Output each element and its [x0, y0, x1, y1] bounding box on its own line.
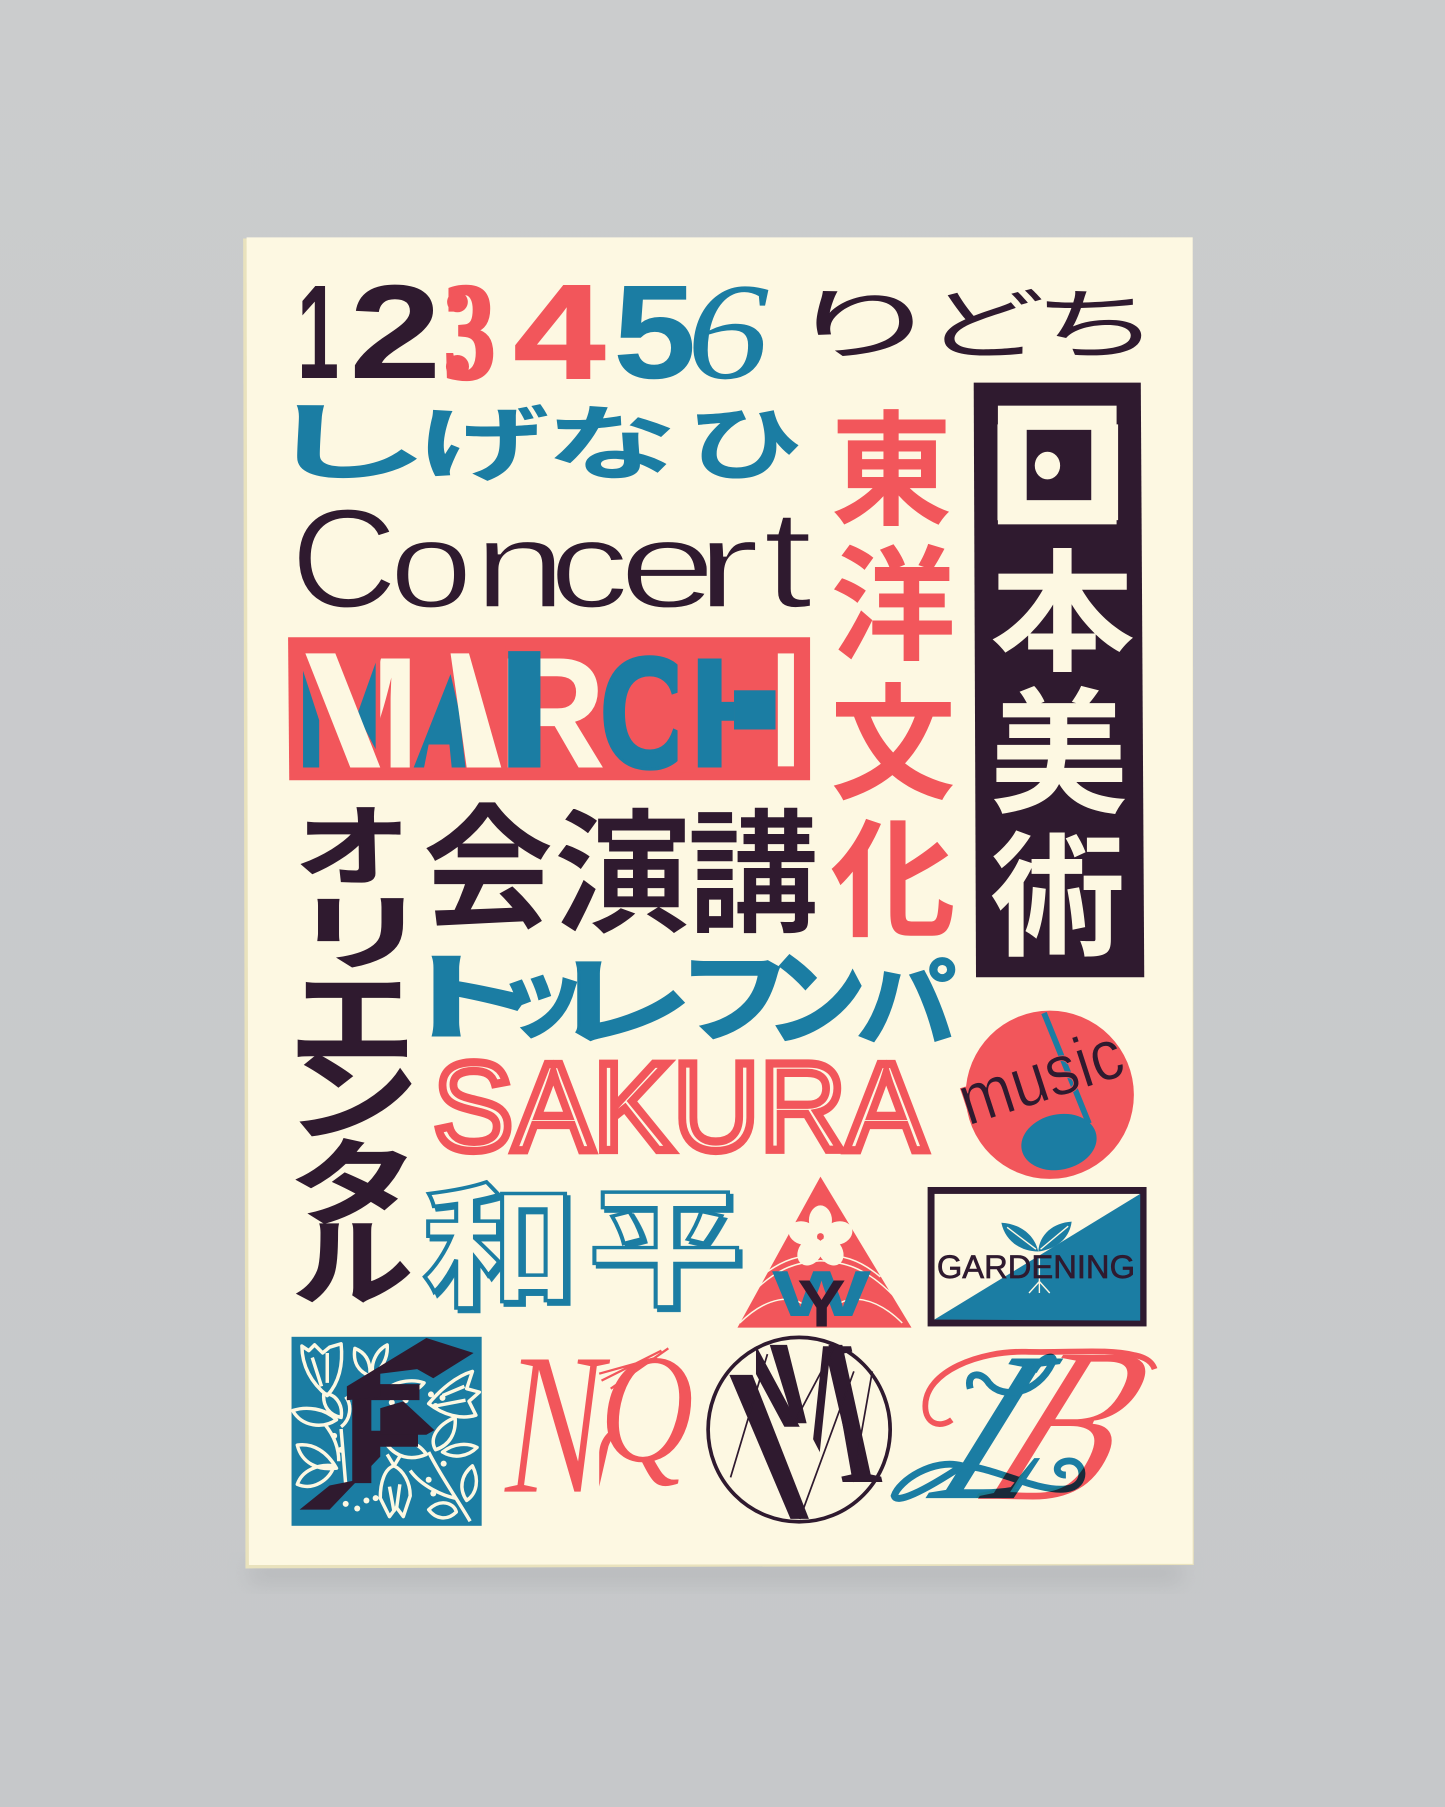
kanji: 和平 outlined: 平	[587, 1144, 744, 1333]
badge: triangle emblem with flower: W	[772, 1258, 872, 1330]
word: SAKURA: SAKURA	[433, 1038, 926, 1178]
kanji: 講演会 reading right to left	[422, 759, 819, 961]
panel: cream card	[243, 237, 1194, 1568]
katakana: パンフレット reading right to left: ン	[765, 913, 867, 1067]
badge: GARDENING box	[931, 1190, 1143, 1323]
numerals 123456	[297, 254, 769, 409]
numerals 123456: 5	[613, 257, 696, 407]
badge: GARDENING box: GARDENING	[937, 1249, 1135, 1285]
vertical kanji: 東洋文化: 東	[831, 372, 952, 551]
word: Concert: t	[763, 481, 813, 638]
monogram: N Q in red	[503, 1311, 694, 1537]
panel: MARCH red banner: C	[599, 624, 694, 801]
word: Concert: r	[695, 496, 760, 634]
panel: 日本美術 dark column: 日	[971, 384, 1144, 544]
word: Concert: c	[549, 497, 629, 634]
kana: ひなげし in blue: し	[261, 374, 431, 497]
vertical kanji: 東洋文化: 文	[830, 645, 956, 826]
badge: triangle emblem with flower: Y	[797, 1266, 846, 1341]
kana: ひなげし in blue: ひ	[687, 378, 803, 497]
panel: MARCH red banner: H	[687, 625, 806, 802]
katakana: パンフレット reading right to left	[384, 913, 956, 1067]
kanji: 講演会 reading right to left: 演	[553, 767, 691, 961]
badge: triangle emblem with flower	[737, 1177, 911, 1341]
kanji: 講演会 reading right to left: 会	[422, 759, 554, 958]
kanji: 和平 outlined	[421, 1140, 744, 1336]
vertical katakana: オリエンタル: タ	[289, 1109, 419, 1244]
badge: music note circle: music	[948, 1013, 1133, 1141]
vertical kanji: 東洋文化: 化	[830, 779, 956, 963]
numerals 123456: 4	[514, 257, 605, 407]
monogram: L B overlapped: B	[951, 1301, 1186, 1550]
monogram: L B overlapped: L	[903, 1308, 1119, 1545]
letter F	[300, 1338, 474, 1514]
numerals 123456: 6	[687, 254, 769, 408]
floral pattern	[293, 1344, 479, 1521]
vertical katakana: オリエンタル: ン	[286, 1014, 418, 1161]
kana: ちどり reading right to left: り	[781, 263, 947, 375]
kana: ひなげし in blue: げ	[418, 378, 549, 497]
kana: ちどり reading right to left: ち	[1032, 263, 1160, 375]
word: Concert: e	[619, 496, 717, 634]
kana: ひなげし in blue	[261, 374, 803, 497]
kana: ちどり reading right to left: ど	[923, 263, 1045, 375]
monogram: circle M: M	[711, 1297, 897, 1527]
panel: 日本美術 dark column: 美	[990, 645, 1128, 841]
katakana: パンフレット reading right to left: ッ	[497, 926, 588, 1056]
kana: ひなげし in blue: な	[546, 378, 677, 497]
numerals 123456: 2	[349, 257, 441, 406]
katakana: パンフレット reading right to left: パ	[856, 928, 956, 1067]
numerals 123456: 3	[444, 256, 495, 409]
vertical katakana: オリエンタル: ル	[293, 1187, 413, 1325]
katakana: パンフレット reading right to left: フ	[678, 919, 792, 1062]
vertical katakana: オリエンタル: オ	[295, 777, 410, 904]
letter F: F	[343, 1354, 424, 1514]
numerals 123456: 1	[297, 257, 339, 406]
monogram: N Q in red: Q	[599, 1323, 694, 1496]
vertical katakana: オリエンタル: リ	[292, 867, 430, 986]
word: Concert: C	[290, 479, 398, 638]
panel: MARCH red banner	[288, 624, 810, 802]
word: Concert	[290, 479, 813, 638]
panel: 日本美術 dark column: 術	[990, 789, 1125, 984]
vertical kanji: 東洋文化	[830, 372, 956, 963]
kana: ちどり reading right to left	[781, 263, 1160, 375]
panel: MARCH red banner: M	[295, 624, 420, 801]
katakana: パンフレット reading right to left: レ	[549, 924, 694, 1064]
panel: MARCH red banner: R	[498, 624, 606, 801]
kanji: 和平 outlined: 和	[421, 1140, 578, 1336]
panel: MARCH red banner: A	[414, 624, 501, 801]
katakana: パンフレット reading right to left: ト	[384, 923, 547, 1059]
word: Concert: n	[474, 496, 567, 634]
vertical katakana: オリエンタル: エ	[289, 933, 415, 1089]
panel: floral F block	[292, 1337, 482, 1526]
word: Concert: o	[389, 497, 473, 634]
vertical katakana: オリエンタル	[286, 777, 430, 1325]
panel: 日本美術 dark column: 本	[990, 507, 1135, 698]
monogram: N Q in red: N	[503, 1311, 611, 1537]
kanji: 講演会 reading right to left: 講	[687, 767, 819, 961]
vertical kanji: 東洋文化: 洋	[830, 506, 956, 685]
panel: 日本美術 dark column	[971, 383, 1144, 984]
